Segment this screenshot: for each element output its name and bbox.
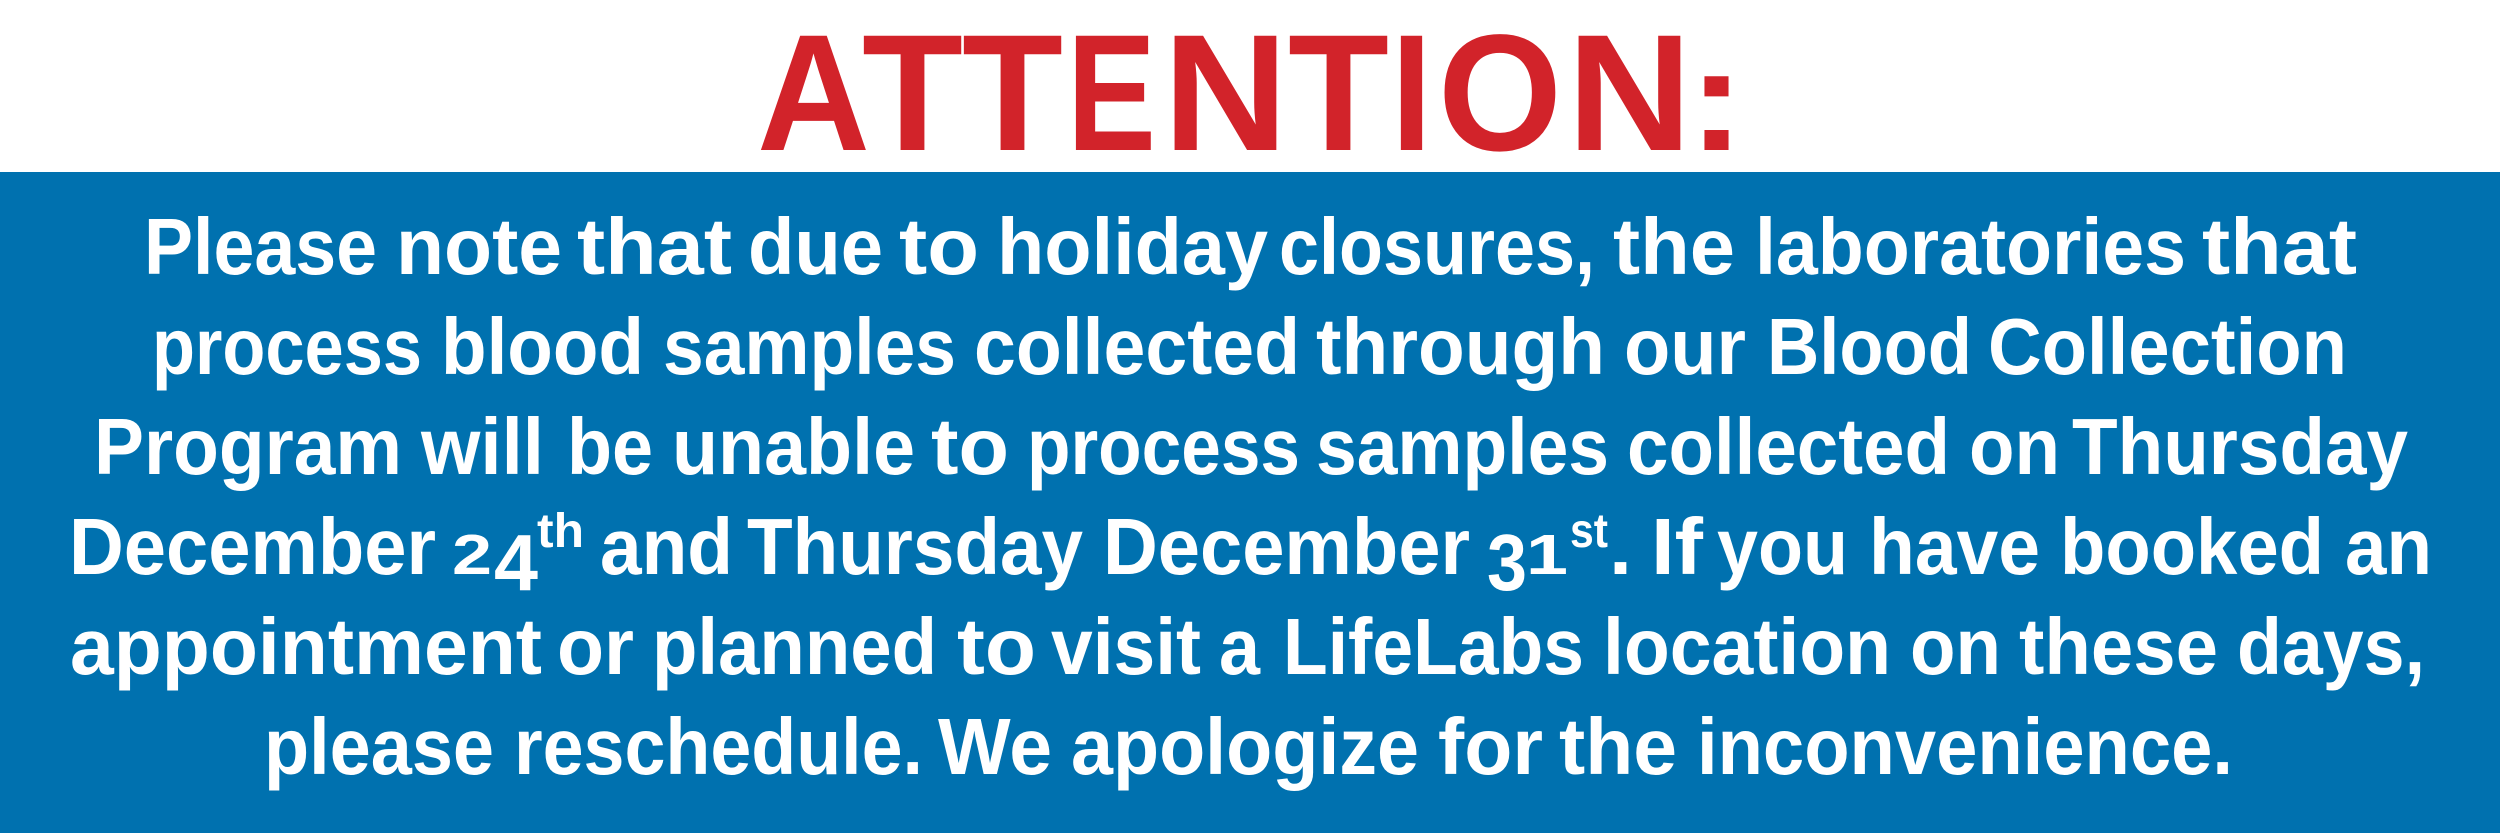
text line 1: laboratories (1755, 202, 2186, 291)
text line 6: for (1438, 702, 1543, 791)
text line 2: Collection (1988, 302, 2347, 391)
text line 1: closures, (1279, 202, 1595, 291)
text line 1 (144, 202, 2357, 291)
text line 4: . (1609, 502, 1632, 591)
text line 4: booked (2060, 502, 2324, 591)
text line 4: and (600, 502, 733, 591)
text line 1: holiday (997, 202, 1268, 291)
text line 2: samples (663, 302, 956, 391)
text line 3: process (1027, 402, 1300, 491)
text line 1: note (396, 202, 562, 291)
text line 3: samples (1316, 402, 1609, 491)
text line 4: If (1651, 502, 1703, 591)
text line 4: December (69, 502, 436, 591)
text line 4: you (1717, 502, 1848, 591)
text line 1: that (2202, 202, 2357, 291)
text line 6: the (1559, 702, 1677, 791)
text line 6 (264, 702, 2233, 791)
text line 5: to (957, 602, 1036, 691)
text line 1: Please (144, 202, 377, 291)
text line 5: location (1603, 602, 1891, 691)
text line 3 (94, 402, 2408, 491)
title: T (862, 1, 963, 186)
text line 5: days, (2237, 602, 2425, 691)
text line 6: apologize (1071, 702, 1419, 791)
text line 6: We (938, 702, 1052, 791)
text line 4: th (537, 505, 584, 558)
text line 5: or (557, 602, 634, 691)
text line 4: 4 (494, 518, 538, 607)
title: N (1567, 1, 1692, 186)
text line 3: will (420, 402, 544, 491)
text line 2 (152, 302, 2347, 391)
text line 4 (69, 502, 2432, 607)
text line 2: blood (441, 302, 644, 391)
title: T (962, 1, 1063, 186)
text line 6: please (264, 702, 494, 791)
text line 5: LifeLabs (1283, 602, 1584, 691)
panel: notice (0, 172, 2500, 833)
text line 5: these (2019, 602, 2218, 691)
title: N (1163, 1, 1288, 186)
title (757, 1, 1745, 186)
title: A (757, 1, 870, 186)
title: E (1067, 1, 1156, 186)
text line 4: Thursday (747, 502, 1083, 591)
text line 5: visit (1051, 602, 1201, 691)
text line 2: collected (974, 302, 1300, 391)
text line 3: to (931, 402, 1009, 491)
text line 5 (70, 602, 2425, 691)
text line 1: due (748, 202, 883, 291)
text line 4: an (2345, 502, 2432, 591)
text line 4: have (1869, 502, 2040, 591)
title: I (1391, 1, 1432, 186)
text line 2: process (152, 302, 422, 391)
text line 5: on (1910, 602, 2001, 691)
text line 4: 2 (452, 523, 492, 587)
text line 2: through (1316, 302, 1605, 391)
text line 3: Thursday (2072, 402, 2408, 491)
text line 4: st (1570, 505, 1608, 558)
text line 3: unable (672, 402, 915, 491)
text line 1: to (899, 202, 979, 291)
text line 5: appointment (70, 602, 542, 691)
text line 4: 1 (1526, 523, 1568, 587)
text line 3: collected (1627, 402, 1950, 491)
text line 5: planned (652, 602, 937, 691)
text line 4: 3 (1487, 518, 1527, 607)
text line 3: on (1969, 402, 2060, 491)
text line 2: Blood (1767, 302, 1972, 391)
text line 6: inconvenience. (1697, 702, 2233, 791)
text line 4: December (1103, 502, 1470, 591)
text line 3: Program (94, 402, 402, 491)
text line 5: a (1219, 602, 1260, 691)
text line 2: our (1624, 302, 1746, 391)
text line 3: be (567, 402, 653, 491)
text line 1: the (1613, 202, 1735, 291)
text line 6: reschedule. (514, 702, 923, 791)
text line 1: that (577, 202, 732, 291)
title: : (1688, 18, 1745, 181)
title: O (1438, 1, 1562, 186)
title: T (1288, 1, 1389, 186)
